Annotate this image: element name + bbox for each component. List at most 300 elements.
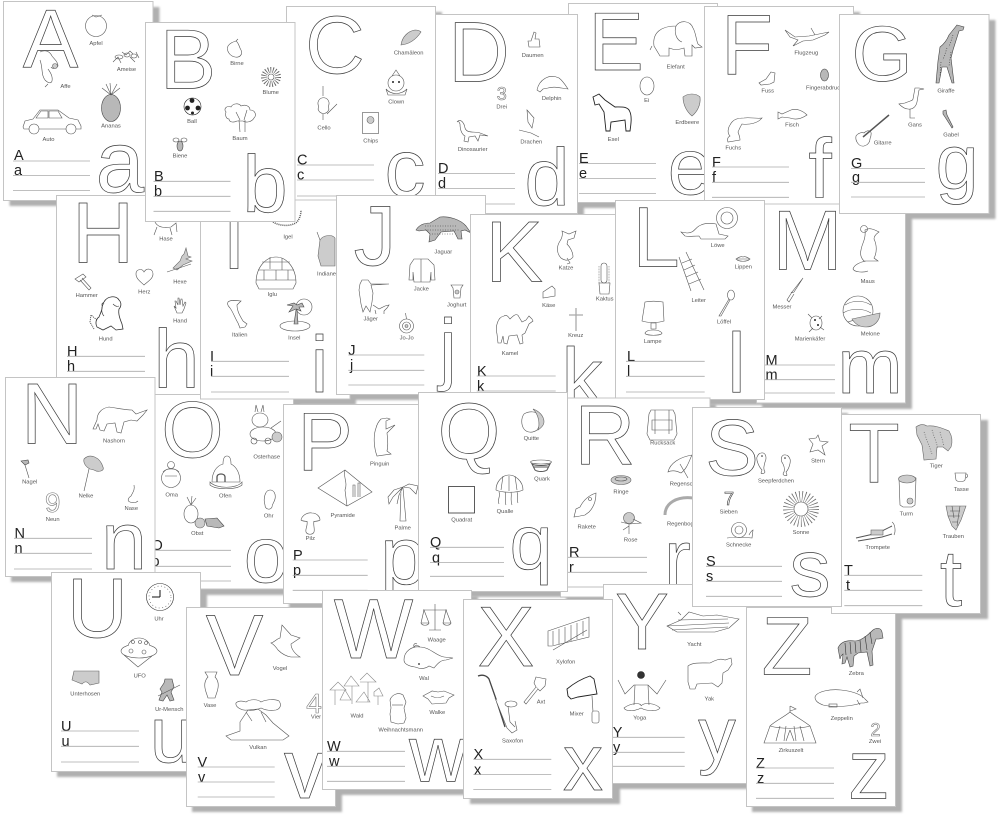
icon: Tasse bbox=[954, 473, 969, 493]
writing lines R: r bbox=[569, 560, 574, 576]
writing lines U: U bbox=[61, 719, 71, 735]
writing lines N bbox=[14, 526, 92, 569]
icon: Erdbeere bbox=[675, 94, 700, 126]
writing lines L: l bbox=[627, 364, 630, 380]
page: letter U bbox=[52, 561, 200, 779]
icon: Insel: Insel bbox=[288, 335, 300, 341]
icon: Nashorn: Nashorn bbox=[103, 439, 125, 445]
page: letter E bbox=[568, 0, 718, 211]
big letter l: l bbox=[727, 316, 746, 410]
icon: Löwe bbox=[681, 208, 738, 249]
page: letter M bbox=[756, 194, 906, 410]
big letter X: X bbox=[478, 590, 534, 685]
icon: Fuchs bbox=[725, 118, 762, 152]
icon: Fuchs: Fuchs bbox=[725, 146, 741, 152]
big letter x: x bbox=[563, 718, 603, 807]
icon: Rose: Rose bbox=[624, 538, 637, 544]
writing lines L: L bbox=[627, 349, 635, 365]
writing lines I: i bbox=[210, 364, 213, 380]
number: Zwei bbox=[869, 720, 881, 745]
big letter d: d bbox=[524, 133, 570, 223]
big letter v: v bbox=[284, 722, 326, 816]
big letter O: O bbox=[161, 385, 224, 474]
icon: Pilz: Pilz bbox=[306, 536, 315, 542]
icon: Nagel bbox=[21, 460, 37, 486]
writing lines Q bbox=[430, 535, 504, 576]
writing lines M: M bbox=[766, 353, 778, 369]
writing lines K: K bbox=[477, 364, 487, 380]
number: Drei: 3 bbox=[497, 84, 507, 104]
big letter B: B bbox=[160, 13, 216, 107]
icon: Weihnachtsmann bbox=[378, 694, 423, 734]
icon: Pinguin bbox=[370, 418, 395, 467]
icon: Vase bbox=[204, 672, 218, 709]
icon: Yak: Yak bbox=[705, 696, 714, 702]
writing lines Y: Y bbox=[613, 725, 623, 741]
writing lines D: d bbox=[438, 176, 446, 192]
icon: Leiter bbox=[679, 252, 706, 304]
writing lines G: g bbox=[852, 170, 860, 186]
icon: Maus: Maus bbox=[861, 279, 875, 285]
writing lines D: D bbox=[438, 161, 448, 177]
icon: Palme: Palme bbox=[394, 526, 411, 532]
icon: Birne: Birne bbox=[230, 61, 244, 67]
icon: Wald bbox=[330, 673, 383, 720]
icon: Seepferdchen: Seepferdchen bbox=[758, 478, 794, 484]
big letter q: q bbox=[510, 500, 552, 586]
icon: Löffel: Löffel bbox=[717, 320, 731, 326]
icon: Jo-Jo bbox=[400, 313, 414, 342]
number: Neun: 9 bbox=[45, 487, 60, 518]
writing lines X: x bbox=[474, 762, 482, 778]
icon: Messer bbox=[772, 278, 803, 311]
icon: Kamel bbox=[496, 315, 533, 357]
icon: Affe bbox=[40, 51, 71, 90]
big letter o: o bbox=[244, 510, 288, 599]
icon: Yoga bbox=[618, 672, 666, 721]
big letter u: u bbox=[150, 690, 194, 779]
icon: Flugzeug: Flugzeug bbox=[794, 50, 818, 56]
icon: Saxofon bbox=[478, 675, 523, 744]
icon: Jäger: Jäger bbox=[363, 317, 378, 323]
writing lines V: V bbox=[198, 755, 208, 771]
big letter U: U bbox=[67, 561, 128, 655]
icon: Ball: Ball bbox=[187, 119, 197, 125]
writing lines O bbox=[152, 538, 231, 581]
icon: Nagel: Nagel bbox=[22, 480, 37, 486]
icon: UFO: UFO bbox=[134, 674, 146, 680]
big letter k: k bbox=[562, 332, 604, 423]
icon: UFO bbox=[121, 638, 157, 680]
big letter t: t bbox=[940, 534, 962, 623]
icon: Zirkuszelt: Zirkuszelt bbox=[779, 748, 804, 754]
icon: Regenbogen bbox=[665, 498, 700, 527]
page: letter Z bbox=[746, 600, 896, 817]
icon: Axt: Axt bbox=[537, 699, 546, 705]
page: letter A bbox=[4, 0, 153, 211]
icon: Fingerabdruck: Fingerabdruck bbox=[806, 85, 843, 91]
icon: Seepferdchen bbox=[757, 453, 794, 484]
writing lines M bbox=[765, 353, 835, 393]
icon: Fisch: Fisch bbox=[785, 123, 799, 129]
icon: Kreuz bbox=[568, 308, 583, 339]
big letter W: W bbox=[334, 582, 413, 676]
icon: Nashorn bbox=[93, 407, 147, 445]
writing lines F bbox=[712, 155, 789, 197]
icon: Melone: Melone bbox=[861, 332, 880, 338]
writing lines S: S bbox=[706, 554, 716, 570]
icon: Gabel bbox=[943, 110, 959, 138]
number: Sieben: Sieben bbox=[720, 510, 738, 516]
icon: Tasse: Tasse bbox=[954, 487, 969, 493]
icon: Zebra bbox=[838, 628, 883, 677]
icon: Blume: Blume bbox=[262, 90, 279, 96]
icon: Ur-Mensch: Ur-Mensch bbox=[155, 707, 183, 713]
icon: Clown bbox=[386, 70, 407, 106]
icon: Vulkan bbox=[226, 700, 289, 751]
icon: Elefant: Elefant bbox=[667, 64, 685, 70]
icon: Baum: Baum bbox=[232, 136, 248, 142]
big letter T: T bbox=[848, 406, 900, 500]
number: Zwei: Zwei bbox=[869, 739, 881, 745]
page: letter Q bbox=[418, 387, 568, 592]
writing lines P bbox=[293, 548, 368, 590]
icon: Jacke: Jacke bbox=[414, 287, 429, 293]
icon: Hund: Hund bbox=[99, 337, 113, 343]
icon: Mixer bbox=[567, 676, 599, 723]
big letter j: j bbox=[437, 303, 457, 392]
icon: Kaktus bbox=[596, 263, 614, 303]
number: Neun: Neun bbox=[46, 517, 60, 523]
number: Vier: 4 bbox=[306, 688, 322, 719]
writing lines K: k bbox=[477, 379, 485, 395]
icon: Pyramide bbox=[318, 470, 372, 519]
writing lines S: s bbox=[706, 569, 713, 585]
icon: Marienkäfer: Marienkäfer bbox=[795, 336, 825, 342]
icon: Kaktus: Kaktus bbox=[596, 297, 614, 303]
writing lines K bbox=[477, 364, 556, 406]
icon: Hammer bbox=[75, 274, 98, 299]
icon: Palme bbox=[388, 484, 418, 532]
big letter r: r bbox=[664, 514, 691, 603]
icon: Waage: Waage bbox=[428, 638, 446, 644]
icon: Herz bbox=[136, 269, 153, 296]
icon: Käse bbox=[542, 286, 555, 309]
big letter P: P bbox=[297, 395, 353, 488]
icon: Obst bbox=[184, 496, 224, 537]
icon: Walke: Walke bbox=[429, 710, 445, 716]
icon: Gans bbox=[899, 88, 924, 128]
icon: Fuss bbox=[759, 72, 775, 94]
writing lines R bbox=[568, 545, 647, 587]
writing lines J bbox=[348, 343, 424, 385]
icon: Weihnachtsmann: Weihnachtsmann bbox=[378, 728, 423, 734]
icon: Yoga: Yoga bbox=[633, 715, 647, 721]
icon: Walke bbox=[423, 691, 454, 716]
big letter M: M bbox=[773, 194, 842, 288]
icon: Dinosaurier bbox=[457, 120, 488, 153]
icon: Zirkuszelt bbox=[764, 706, 816, 754]
writing lines G bbox=[851, 156, 925, 197]
writing lines Y bbox=[613, 725, 685, 766]
big letter m: m bbox=[838, 322, 902, 410]
number: Sieben bbox=[720, 489, 738, 516]
icon: Auto: Auto bbox=[43, 137, 54, 143]
big letter R: R bbox=[575, 388, 635, 482]
page: letter G bbox=[840, 10, 989, 214]
page: letter R bbox=[560, 388, 710, 603]
icon: Trompete bbox=[856, 522, 895, 551]
icon: Ur-Mensch bbox=[155, 679, 183, 713]
writing lines N: n bbox=[14, 541, 23, 557]
writing lines B: B bbox=[154, 169, 164, 185]
icon: Jäger bbox=[359, 280, 389, 323]
writing lines P: p bbox=[293, 563, 301, 579]
icon: Quark: Quark bbox=[534, 477, 550, 483]
icon: Delphin bbox=[537, 76, 568, 102]
icon: Biene: Biene bbox=[173, 154, 187, 160]
icon: Ringe bbox=[611, 476, 631, 496]
icon: Hase: Hase bbox=[159, 237, 173, 243]
writing lines W: W bbox=[327, 739, 341, 755]
icon: Marienkäfer bbox=[795, 314, 825, 342]
icon: Italien bbox=[228, 300, 247, 338]
big letter i: i bbox=[311, 320, 328, 409]
big letter g: g bbox=[936, 120, 978, 206]
icon: Ameise: Ameise bbox=[117, 67, 136, 73]
writing lines P: P bbox=[293, 548, 303, 564]
writing lines Z: Z bbox=[756, 756, 765, 772]
page: letter F bbox=[704, 0, 854, 216]
icon: Pinguin: Pinguin bbox=[370, 461, 389, 467]
icon: Regenschirm: Regenschirm bbox=[670, 481, 704, 487]
icon: Uhr: Uhr bbox=[154, 617, 164, 623]
icon: Kamel: Kamel bbox=[502, 351, 518, 357]
page: letter T bbox=[832, 406, 980, 623]
icon: Lampe bbox=[642, 301, 664, 345]
writing lines Z bbox=[756, 756, 834, 798]
icon: Rose bbox=[621, 512, 641, 544]
icon: Trauben: Trauben bbox=[943, 534, 964, 540]
page: letter B bbox=[146, 13, 295, 230]
icon: Qualle: Qualle bbox=[497, 509, 513, 515]
writing lines H: h bbox=[67, 359, 75, 375]
icon: Erdbeere: Erdbeere bbox=[675, 120, 699, 126]
icon: Nase bbox=[125, 485, 138, 512]
page: letter P bbox=[284, 395, 433, 604]
icon: Nelke: Nelke bbox=[79, 493, 93, 499]
writing lines T bbox=[844, 563, 922, 606]
icon: Oma: Oma bbox=[165, 493, 179, 499]
icon: Fisch bbox=[778, 109, 807, 129]
icon: Oma bbox=[162, 462, 180, 499]
icon: Nelke bbox=[79, 456, 103, 499]
writing lines H: H bbox=[67, 344, 77, 360]
icon: Yacht: Yacht bbox=[687, 642, 702, 648]
icon: Birne bbox=[227, 39, 244, 67]
icon: Daumen: Daumen bbox=[522, 53, 544, 59]
icon: Zeppelin bbox=[815, 689, 868, 722]
icon: Italien: Italien bbox=[232, 332, 247, 338]
icon: Gans: Gans bbox=[908, 122, 922, 128]
writing lines F: f bbox=[712, 170, 717, 186]
icon: Dinosaurier: Dinosaurier bbox=[458, 147, 488, 153]
icon: Regenbogen: Regenbogen bbox=[667, 521, 700, 527]
writing lines H bbox=[67, 344, 145, 386]
writing lines C: C bbox=[297, 152, 307, 168]
icon: Katze bbox=[557, 231, 576, 272]
icon: Ohr: Ohr bbox=[264, 514, 274, 520]
big letter K: K bbox=[485, 204, 543, 300]
icon: Quitte: Quitte bbox=[524, 436, 539, 442]
page: letter W bbox=[322, 582, 472, 798]
icon: Tiger bbox=[916, 425, 952, 469]
icon: Löwe: Löwe bbox=[711, 243, 725, 249]
writing lines A: a bbox=[14, 163, 23, 179]
icon: Indianer: Indianer bbox=[317, 271, 338, 277]
icon: Lampe: Lampe bbox=[644, 339, 662, 345]
writing lines U: u bbox=[62, 734, 70, 750]
icon: Insel bbox=[280, 299, 312, 341]
writing lines T: t bbox=[846, 578, 850, 594]
writing lines E bbox=[579, 151, 656, 194]
icon: Yacht bbox=[667, 612, 739, 648]
icon: Mixer: Mixer bbox=[570, 712, 584, 718]
writing lines V: v bbox=[198, 770, 206, 786]
writing lines O: o bbox=[152, 554, 160, 570]
icon: Wal: Wal bbox=[419, 676, 429, 682]
writing lines X: X bbox=[474, 747, 484, 763]
page: letter I bbox=[200, 192, 350, 409]
icon: Stern bbox=[809, 435, 828, 465]
writing lines G: G bbox=[851, 156, 862, 172]
icon: Cello bbox=[317, 86, 337, 132]
writing lines E: E bbox=[579, 151, 589, 167]
big letter e: e bbox=[668, 122, 712, 211]
icon: Trauben bbox=[943, 506, 966, 540]
page: letter Y bbox=[604, 577, 752, 784]
writing lines I: I bbox=[210, 349, 214, 365]
writing lines W bbox=[327, 739, 405, 781]
number: Drei: Drei bbox=[496, 105, 507, 111]
big letter c: c bbox=[384, 123, 426, 214]
icon: Ofen bbox=[210, 456, 242, 500]
writing lines I bbox=[210, 349, 289, 392]
page: letter H bbox=[56, 186, 206, 406]
icon: Regenschirm bbox=[668, 455, 704, 487]
icon: Affe: Affe bbox=[60, 84, 71, 90]
icon: Apfel bbox=[86, 15, 106, 47]
big letter Z: Z bbox=[762, 600, 812, 693]
icon: Trompete: Trompete bbox=[865, 545, 890, 551]
writing lines V bbox=[198, 755, 275, 797]
icon: Flugzeug bbox=[785, 28, 829, 56]
icon: Esel bbox=[593, 94, 631, 143]
icon: Chamäleon: Chamäleon bbox=[394, 50, 424, 56]
page: letter V bbox=[186, 598, 336, 816]
writing lines N: N bbox=[14, 526, 25, 542]
icon: Rakete: Rakete bbox=[578, 524, 596, 530]
icon: Wal bbox=[404, 644, 453, 682]
icon: Jaguar: Jaguar bbox=[434, 249, 452, 255]
icon: Hexe bbox=[167, 248, 192, 286]
icon: Gitarre: Gitarre bbox=[874, 141, 892, 147]
icon: Melone bbox=[843, 296, 880, 338]
icon: Xylofon bbox=[548, 617, 589, 666]
icon: Chips bbox=[362, 112, 378, 144]
page: letter J bbox=[336, 189, 486, 394]
icon: Indianer bbox=[317, 232, 338, 277]
icon: Clown: Clown bbox=[388, 100, 404, 106]
icon: Iglu bbox=[256, 257, 296, 298]
icon: Leiter: Leiter bbox=[691, 298, 706, 304]
writing lines J: j bbox=[349, 358, 353, 374]
writing lines E: e bbox=[579, 166, 587, 182]
big letter n: n bbox=[101, 496, 147, 587]
big letter s: s bbox=[790, 523, 830, 614]
icon: Ball bbox=[184, 98, 201, 125]
icon: Nase: Nase bbox=[125, 506, 138, 512]
page: letter L bbox=[616, 191, 764, 410]
icon: Turm: Turm bbox=[900, 512, 913, 518]
icon: Jo-Jo: Jo-Jo bbox=[400, 336, 414, 342]
big letter z: z bbox=[848, 723, 890, 817]
icon: Joghurt: Joghurt bbox=[447, 302, 467, 308]
big letter w: w bbox=[408, 710, 467, 798]
icon: Waage bbox=[421, 604, 451, 644]
big letter V: V bbox=[206, 598, 263, 694]
writing lines Z: z bbox=[757, 771, 764, 787]
page: letter X bbox=[464, 590, 612, 807]
writing lines T: T bbox=[844, 563, 853, 579]
icon: Stern: Stern bbox=[811, 459, 825, 465]
icon: Giraffe: Giraffe bbox=[937, 89, 955, 95]
writing lines B bbox=[154, 169, 230, 211]
big letter I: I bbox=[222, 192, 246, 286]
icon: Jaguar bbox=[416, 217, 471, 255]
icon: Unterhosen bbox=[70, 671, 100, 697]
icon: Kreuz: Kreuz bbox=[568, 333, 583, 339]
writing lines A: A bbox=[14, 148, 24, 164]
icon: Vulkan: Vulkan bbox=[249, 745, 267, 751]
writing lines R: R bbox=[569, 545, 579, 561]
icon: Baum bbox=[225, 104, 255, 142]
big letter S: S bbox=[705, 403, 759, 492]
big letter h: h bbox=[153, 312, 200, 406]
writing lines X bbox=[473, 747, 551, 790]
icon: Quadrat bbox=[448, 486, 474, 524]
icon: Chips: Chips bbox=[363, 138, 378, 144]
icon: Igel bbox=[273, 210, 301, 240]
page: letter D bbox=[428, 6, 578, 223]
icon: Joghurt bbox=[447, 285, 467, 308]
icon: Hase bbox=[154, 222, 177, 243]
big letter p: p bbox=[380, 511, 426, 602]
icon: Rakete bbox=[574, 493, 596, 530]
icon: Zebra: Zebra bbox=[849, 671, 865, 677]
icon: Hund bbox=[90, 297, 123, 343]
icon: Ei: Ei bbox=[644, 98, 649, 104]
icon: Uhr bbox=[146, 584, 174, 623]
icon: Katze: Katze bbox=[559, 266, 573, 272]
writing lines D bbox=[438, 161, 515, 204]
icon: Esel: Esel bbox=[608, 137, 619, 143]
page: letter C bbox=[286, 0, 436, 214]
big letter F: F bbox=[721, 0, 773, 94]
icon: Ameise bbox=[113, 51, 139, 73]
icon: Turm bbox=[898, 475, 916, 518]
icon: Jacke bbox=[409, 259, 435, 293]
